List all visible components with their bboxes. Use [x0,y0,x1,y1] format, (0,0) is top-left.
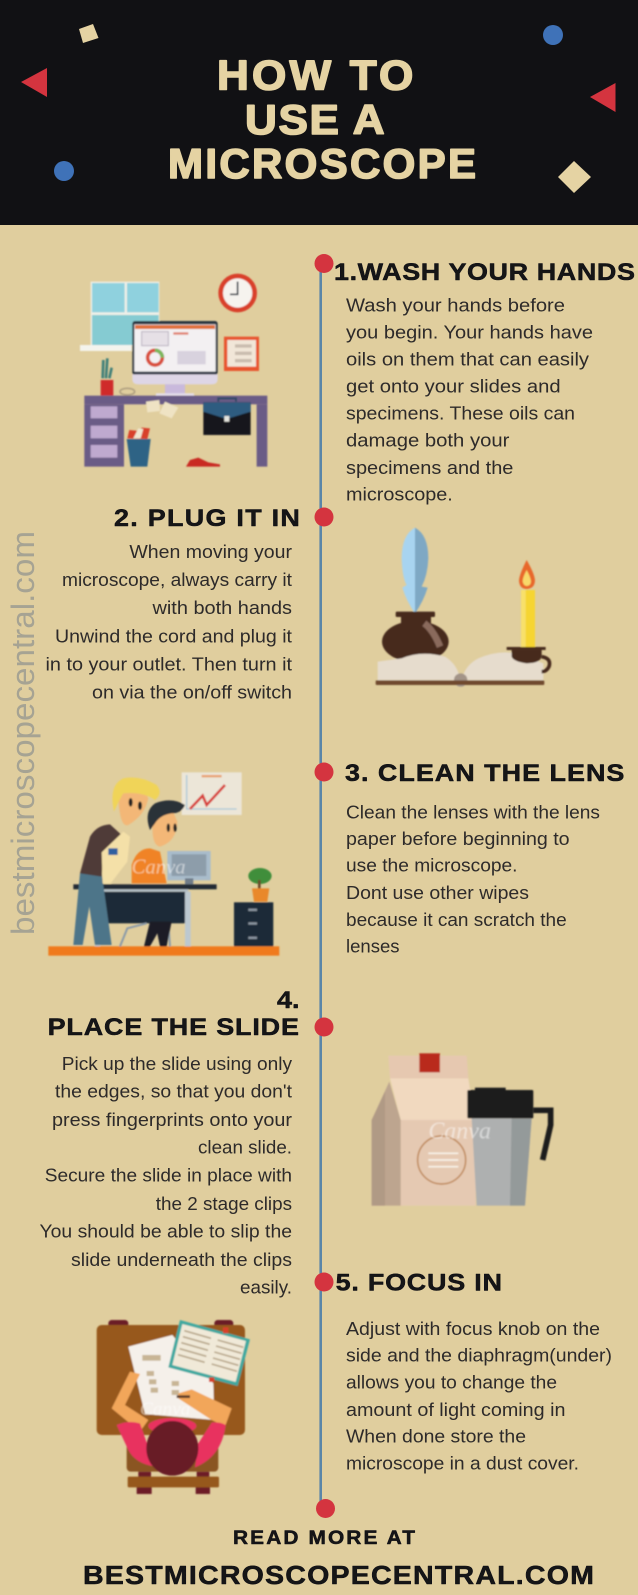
footer call to action [83,1528,594,1590]
text block: step 2: in to your outlet. Then turn it [46,654,292,675]
text block: step 1: get onto your slides and [346,376,561,397]
text block: step 1: specimens and the [346,457,513,478]
text block: step 3 [346,801,600,957]
timeline line [319,265,322,1508]
title: USE A [245,97,385,144]
vertical site watermark: bestmicroscopecentral.com [5,531,41,935]
panel: header [0,0,638,225]
text block: step 4: the 2 stage clips [156,1193,292,1214]
text block: step 1: damage both your [346,430,509,451]
heading: step 4: 4. [277,987,299,1014]
heading: step 1: 1.WASH YOUR HANDS [334,259,635,286]
heading: step 2: 2. PLUG IT IN [114,505,300,532]
text block: step 1: specimens. These oils can [346,402,575,424]
text block: step 3: Dont use other wipes [346,882,529,903]
text block: step 2: Unwind the cord and plug it [55,626,292,647]
panel: step 3 clean the lens [345,760,624,957]
website address: BESTMICROSCOPECENTRAL.COM [83,1560,594,1590]
heading: step 4 [48,987,299,1041]
title: HOW TO [217,52,413,99]
text block: step 2: When moving your [129,541,292,562]
text block: step 1: oils on them that can easily [346,348,590,370]
icon: red triangle right [590,83,616,112]
text block: step 2: with both hands [151,597,292,618]
text block: step 1: you begin. Your hands have [346,322,593,342]
heading: step 4: PLACE THE SLIDE [48,1014,299,1041]
text block: step 1: Wash your hands before [346,295,565,316]
icon: quill inkpot book and candle [376,528,550,687]
text block: step 4: You should be able to slip the [40,1221,292,1242]
text block: step 4: slide underneath the clips [71,1249,292,1270]
timeline dots [314,254,335,1518]
watermark: Canva [140,1399,190,1420]
text block: step 2 [46,541,292,703]
title: MICROSCOPE [168,140,476,187]
read more label: READ MORE AT [233,1528,415,1549]
text block: step 2: on via the on/off switch [92,682,292,703]
icon: tan diamond bottom right [558,161,591,193]
text block: step 5: allows you to change the [346,1372,557,1393]
text block: step 5 [346,1318,612,1473]
panel: step 1 wash your hands [334,259,635,505]
text block: step 4: press fingerprints onto your [52,1109,292,1130]
text block: step 4 [40,1053,293,1298]
watermark: Canva [132,856,186,878]
text block: step 2: microscope, always carry it [62,569,292,590]
text block: step 5: amount of light coming in [346,1399,566,1420]
text block: step 1: microscope. [346,484,453,505]
text block: step 4: clean slide. [198,1136,292,1158]
icon: two men at computer [48,772,279,956]
text block: step 5: microscope in a dust cover. [346,1452,579,1473]
title [168,52,476,187]
heading: step 3: 3. CLEAN THE LENS [345,760,624,787]
heading: step 5: 5. FOCUS IN [336,1270,502,1296]
watermark: Canva [428,1118,491,1144]
icon: tan diamond top left [79,24,98,43]
text block: step 3: paper before beginning to [346,828,570,849]
text block: step 4: easily. [240,1277,292,1298]
icon: blue circle top right [543,25,563,45]
text block: step 5: When done store the [346,1426,526,1447]
panel: step 5 focus in [336,1270,612,1473]
text block: step 4: Pick up the slide using only [62,1053,293,1074]
text block: step 3: lenses [346,936,400,957]
text block: step 5: side and the diaphragm(under) [346,1345,612,1366]
icon: blue circle left [54,161,74,181]
text block: step 5: Adjust with focus knob on the [346,1318,600,1339]
icon: red triangle left [21,68,47,97]
text block: step 4: Secure the slide in place with [45,1165,292,1186]
icon: paper bag and travel mug [372,1053,551,1206]
icon: office desk with computer [80,274,267,467]
panel: step 2 plug it in [46,505,300,703]
text block: step 3: use the microscope. [346,855,518,876]
icon: student at desk from above [97,1320,250,1494]
text block: step 3: because it can scratch the [346,909,567,930]
text block: step 3: Clean the lenses with the lens [346,801,600,822]
text block: step 1 [346,295,593,505]
panel: step 4 place the slide [40,987,299,1298]
text block: step 4: the edges, so that you don't [55,1081,292,1102]
